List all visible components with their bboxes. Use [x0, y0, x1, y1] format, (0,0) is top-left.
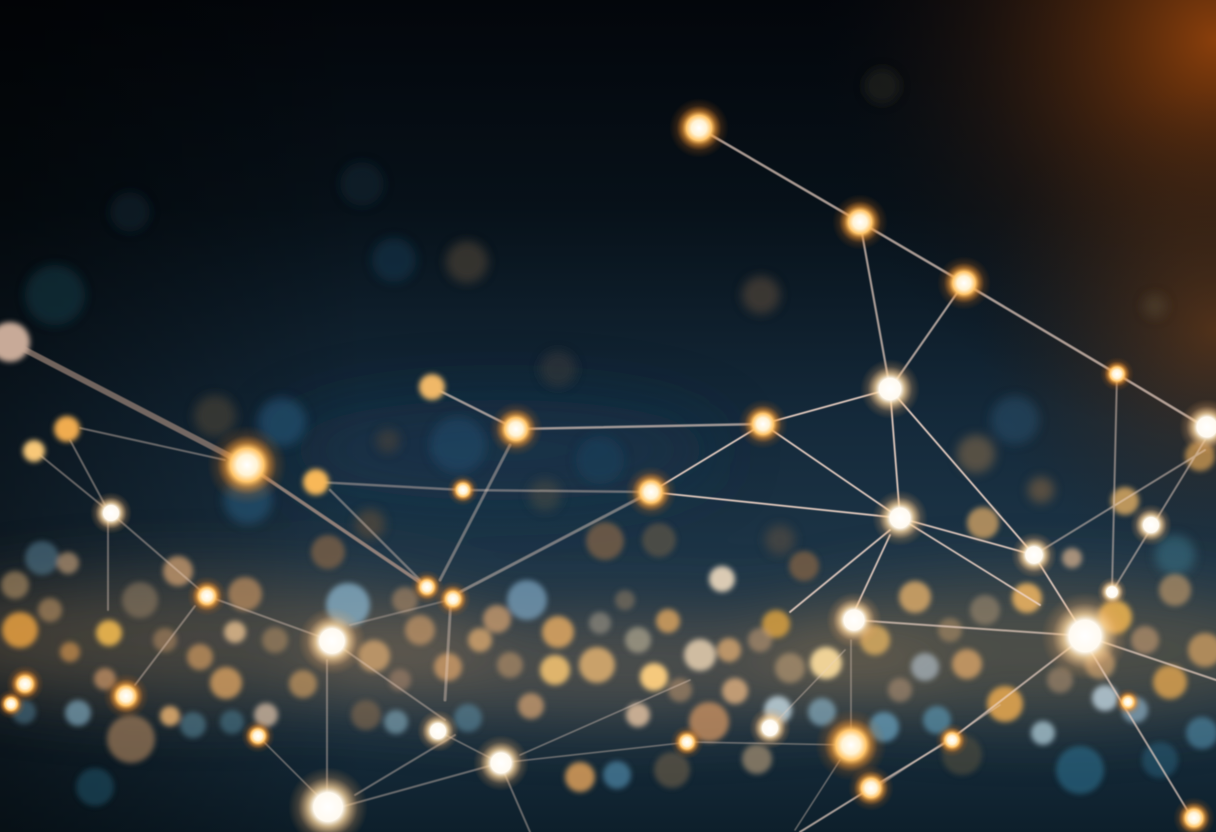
glowing nodes: left and lower network [0, 425, 1215, 832]
glowing nodes: upper network [489, 98, 1216, 607]
upper faint blue and brown bokeh [25, 68, 1195, 575]
bokeh band haze [0, 400, 1216, 715]
bokeh light band [1, 441, 1216, 806]
blurred nodes: left side [0, 322, 445, 495]
